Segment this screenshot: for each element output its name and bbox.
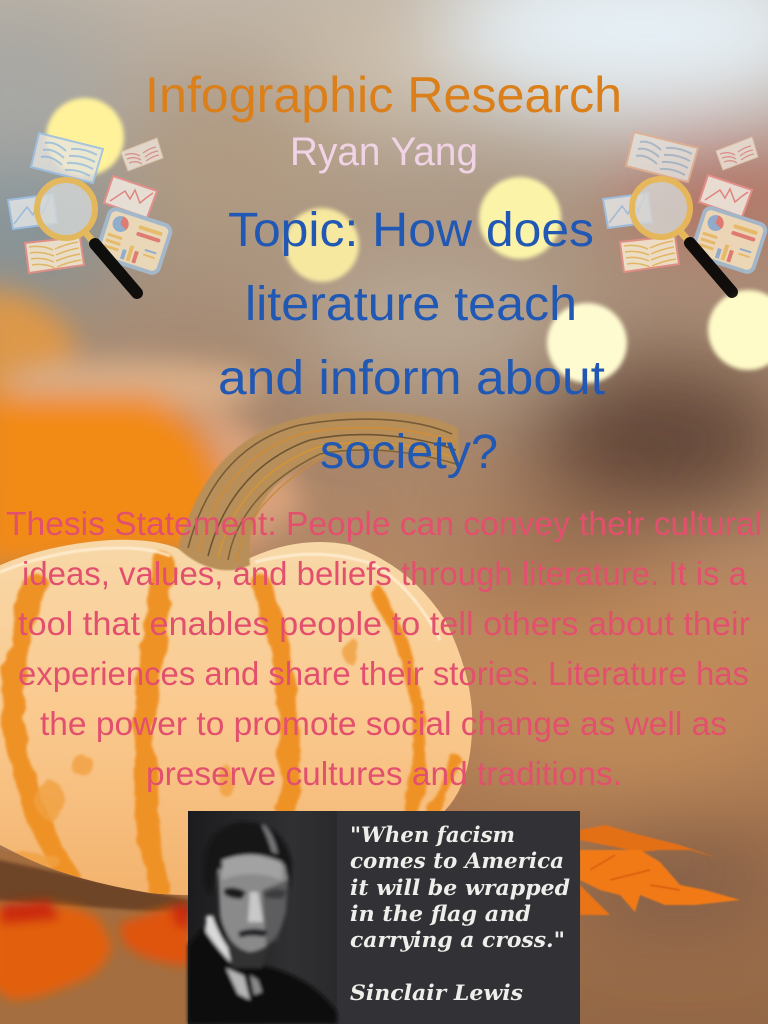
mouth bbox=[238, 929, 268, 938]
table surface bbox=[0, 850, 200, 1024]
quote text: "When facism bbox=[350, 822, 515, 847]
icon: magnifying glass bbox=[37, 180, 137, 293]
icon: line chart blue bbox=[8, 194, 57, 229]
bokeh lights bbox=[46, 98, 768, 383]
autumn leaves: right bbox=[580, 825, 740, 915]
icon: research magnifier and documents, right bbox=[603, 132, 767, 292]
topic question: literature teach bbox=[245, 278, 577, 331]
collar bbox=[206, 915, 240, 968]
icon: dashboard card bbox=[96, 207, 172, 275]
face bbox=[218, 859, 288, 952]
portrait of Sinclair Lewis bbox=[188, 811, 337, 1024]
thesis statement: Thesis Statement: People can convey their cultural bbox=[6, 505, 762, 542]
quote text bbox=[350, 822, 570, 1005]
topic question: and inform about bbox=[218, 352, 605, 405]
jacket bbox=[188, 915, 337, 1024]
pumpkin bbox=[0, 411, 472, 895]
topic question: Topic: How does bbox=[228, 204, 594, 257]
blurred orange pumpkin behind bbox=[0, 290, 305, 570]
quote text: it will be wrapped bbox=[350, 875, 570, 900]
thesis statement bbox=[6, 505, 762, 792]
title: Infographic Research bbox=[145, 67, 622, 123]
quote text: carrying a cross." bbox=[350, 927, 565, 952]
icon: open book yellow bbox=[25, 237, 84, 273]
neck shadow bbox=[225, 935, 270, 968]
autumn leaves: left bbox=[0, 900, 190, 1000]
topic question bbox=[218, 204, 605, 479]
quote card bbox=[188, 811, 580, 1024]
quote text: in the flag and bbox=[350, 901, 531, 926]
thesis statement: ideas, values, and beliefs through literature. It is a bbox=[22, 555, 748, 592]
thesis statement: preserve cultures and traditions. bbox=[146, 755, 622, 792]
thesis statement: experiences and share their stories. Literature has bbox=[18, 655, 749, 692]
author name: Ryan Yang bbox=[290, 130, 478, 174]
pumpkin stem bbox=[178, 411, 460, 570]
icon: line chart red bbox=[104, 176, 157, 218]
icon: open book red bbox=[121, 138, 163, 171]
icon: research magnifier and documents, left bbox=[8, 133, 172, 293]
thesis statement: the power to promote social change as well as bbox=[40, 705, 727, 742]
quote text: comes to America bbox=[350, 848, 564, 873]
hair bbox=[203, 822, 292, 896]
thesis statement: tool that enables people to tell others about their bbox=[18, 605, 750, 642]
icon: open book blue bbox=[31, 133, 103, 183]
quote text: Sinclair Lewis bbox=[350, 980, 523, 1005]
eyes bbox=[224, 888, 246, 899]
topic question: society? bbox=[320, 426, 498, 479]
nose bbox=[248, 892, 263, 922]
